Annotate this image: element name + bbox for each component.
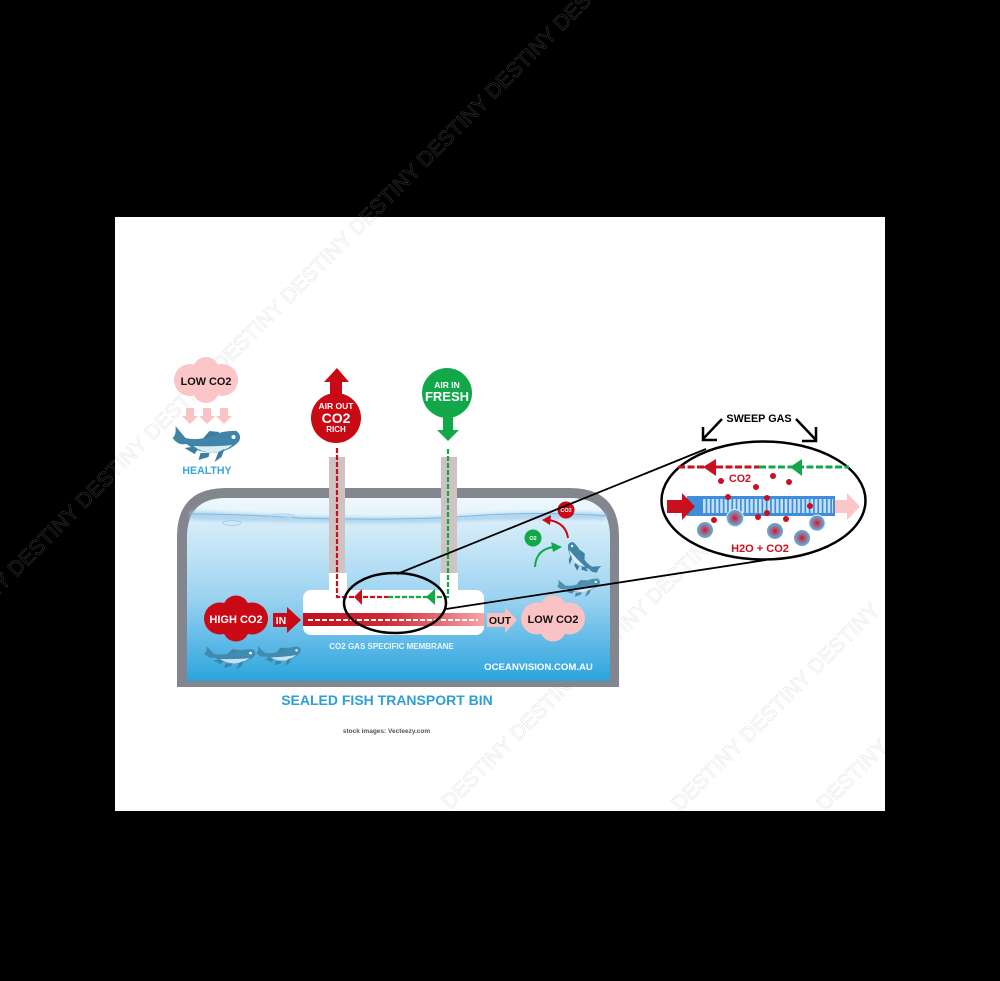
air in pin: FRESH	[425, 389, 469, 404]
high co2 cloud: HIGH CO2	[209, 614, 263, 626]
in arrow	[273, 607, 301, 633]
sweep gas label: SWEEP GAS	[726, 413, 792, 425]
low co2 cloud	[521, 596, 585, 642]
membrane flow bar	[303, 613, 484, 626]
sweep gas arrow left	[703, 419, 722, 440]
air out pin: AIR OUT	[319, 401, 354, 411]
low co2 cloud: LOW CO2	[528, 614, 578, 626]
co2 label: CO2	[729, 473, 751, 485]
sweep gas dashed lines	[678, 459, 849, 476]
sealed fish transport bin	[177, 488, 619, 687]
in arrow red	[667, 493, 695, 520]
healthy fish	[172, 426, 240, 462]
out arrow pink	[835, 493, 860, 520]
fish right: respiration	[524, 502, 603, 600]
watermark on panel: DESTINY DESTINY DESTINY DESTINY DESTINY	[437, 460, 791, 814]
sweep gas lines in membrane	[337, 448, 448, 605]
high co2 cloud	[204, 596, 268, 642]
healthy fish group	[172, 357, 240, 477]
air out pipe	[329, 457, 345, 575]
watermark on panel	[115, 217, 885, 811]
white panel	[115, 217, 885, 811]
o2 bubble: O2	[529, 536, 537, 542]
fish bottom left	[204, 643, 302, 669]
air in pin: AIR IN	[434, 380, 460, 390]
membrane housing	[303, 573, 484, 635]
low co2 cloud: LOW CO2	[181, 376, 231, 388]
healthy label: HEALTHY	[182, 465, 232, 477]
image credit: stock images: Vecteezy.com	[343, 728, 430, 735]
o2 arc arrow	[535, 542, 562, 567]
sweep gas arrow right	[796, 419, 816, 441]
water bubbles	[697, 510, 825, 546]
co2 dots	[711, 473, 813, 523]
air in pipe	[441, 457, 457, 575]
air in pin	[422, 368, 472, 441]
air out pin	[311, 368, 361, 443]
h2o + co2 label: H2O + CO2	[731, 543, 789, 555]
air out pin: RICH	[326, 425, 346, 434]
membrane tube	[687, 496, 835, 516]
membrane label: CO2 GAS SPECIFIC MEMBRANE	[329, 642, 454, 651]
watermark on panel: DESTINY DESTINY DESTINY	[667, 598, 884, 816]
in arrow: IN	[276, 615, 286, 627]
down arrows	[182, 408, 232, 424]
bin title: SEALED FISH TRANSPORT BIN	[281, 692, 493, 708]
website label: OCEANVISION.COM.AU	[484, 662, 593, 673]
zoomed membrane detail	[662, 442, 866, 560]
air out pin: CO2	[322, 410, 351, 426]
watermark on panel: DESTINY	[812, 735, 893, 816]
small ellipse and callout lines	[344, 449, 766, 633]
out arrow: OUT	[489, 615, 512, 627]
co2 bubble: CO2	[560, 508, 572, 514]
out arrow	[487, 607, 517, 633]
co2 arc arrow	[542, 515, 568, 538]
